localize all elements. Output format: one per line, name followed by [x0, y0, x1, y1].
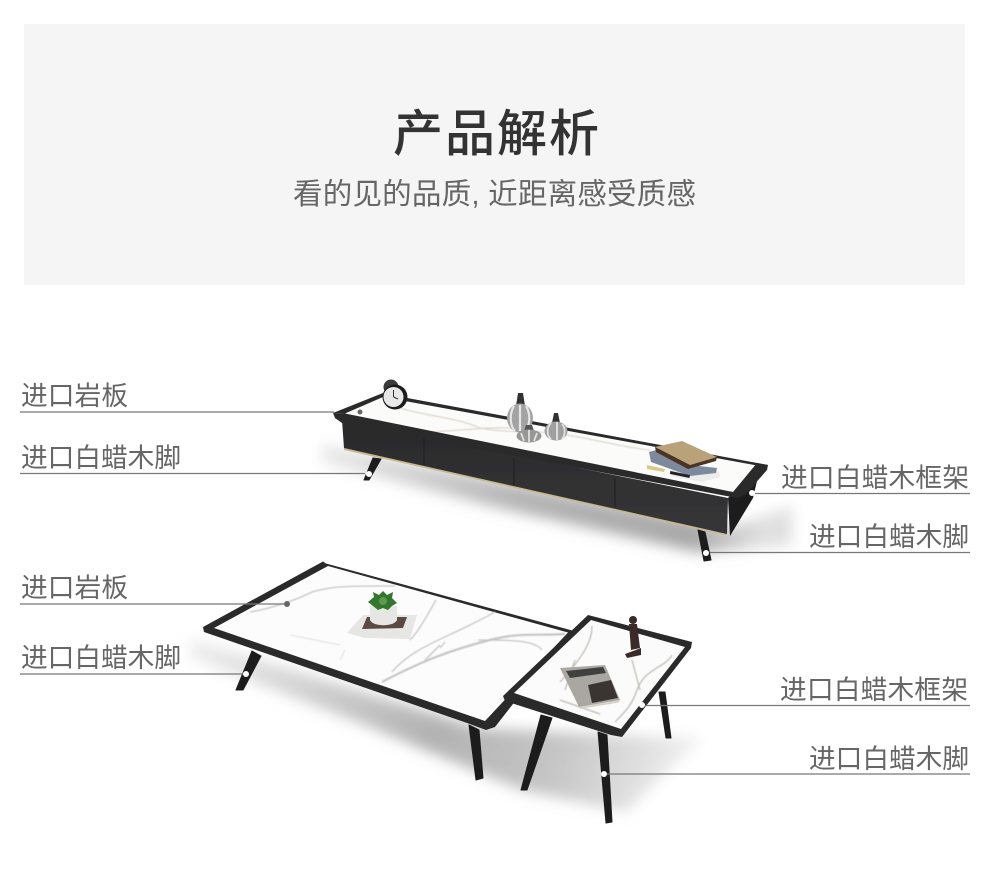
callout: small table leg: 进口白蜡木脚: [809, 744, 969, 774]
small table frame: [503, 615, 692, 737]
callout: table left leg: 进口白蜡木脚: [21, 643, 181, 673]
cabinet front: [342, 420, 728, 534]
callout: cabinet frame: 进口白蜡木框架: [781, 463, 969, 493]
large table frame: [203, 562, 574, 730]
cabinet legs: [364, 458, 711, 561]
cabinet top frame: [333, 393, 768, 498]
subtitle: 看的见的品质, 近距离感受质感: [293, 178, 696, 211]
TV cabinet illustration: [322, 380, 792, 561]
title: 产品解析: [393, 106, 599, 162]
callout: small table frame: 进口白蜡木框架: [780, 675, 968, 705]
small table legs: [521, 692, 671, 823]
cabinet marker dots: [366, 471, 755, 556]
cabinet marble veining: [400, 408, 650, 450]
books: [647, 441, 720, 482]
clock: [382, 380, 408, 410]
tables shadow: [190, 638, 702, 812]
callout: cabinet stone top: 进口岩板: [21, 381, 128, 411]
large table legs: [236, 651, 483, 780]
small table top: [514, 620, 685, 729]
coffee table illustration: [190, 562, 702, 823]
cabinet brass strip: [344, 448, 727, 536]
plant tray: [347, 591, 417, 639]
cabinet shadow: [322, 444, 792, 553]
large table top: [214, 566, 568, 721]
magazine: [560, 665, 620, 709]
cabinet side: [728, 468, 760, 536]
callout: table stone top: 进口岩板: [21, 573, 128, 603]
table marker dots: [243, 671, 645, 777]
large table marble veining: [250, 586, 565, 700]
callout: cabinet left leg: 进口白蜡木脚: [21, 443, 181, 473]
header panel: [24, 24, 965, 285]
vases: [507, 393, 568, 442]
callout: cabinet right leg: 进口白蜡木脚: [809, 522, 969, 552]
small table marble veining: [560, 626, 672, 722]
figurine: [625, 616, 641, 658]
cabinet marble top: [345, 396, 757, 492]
